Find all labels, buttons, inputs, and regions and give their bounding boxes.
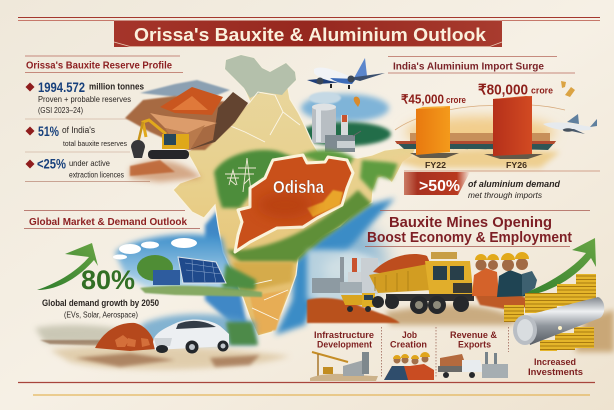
benefit: increased investments: Increased [534,357,576,367]
stat: share of India: total bauxite reserves [63,139,127,148]
Odisha highlighted state: Odisha [273,177,324,197]
illustration: gold coins [504,274,596,351]
callout: imports share [404,171,600,200]
title banner: Orissa's Bauxite & Aluminium Outlook [134,24,487,45]
bar chart: import value: FY22 [425,161,447,170]
stat: total reserves: million tonnes [89,82,144,92]
benefit: infrastructure development: Infrastructure [314,330,374,340]
Odisha highlighted state [235,155,353,252]
icon: airplane right [543,114,597,145]
stat: 80 percent demand growth: 80% [81,265,135,295]
heading: mines opening: Bauxite Mines Opening [389,215,552,231]
illustration: dump truck [369,252,474,314]
icon: growth arrow [37,243,98,290]
illustration: sky, solar panels, landscape [113,234,262,297]
benefit: job creation: Job [402,330,417,340]
stat: share of India: of India's [62,125,95,135]
stat: total reserves: (GSI 2023–24) [38,106,83,115]
benefit: increased investments: Investments [528,367,583,377]
illustration: small dump truck [341,293,375,312]
bar chart: import value: crore [446,95,466,105]
airplane top [307,58,385,89]
icons: floating aluminium flakes [561,81,575,97]
heading: mines opening [365,210,590,246]
map of India [173,55,417,336]
benefit: infrastructure development: Development [317,340,372,350]
stat: total reserves: Proven + probable reserves [38,94,131,104]
heading: import surge: India's Aluminium Import Surge [393,60,544,72]
callout: imports share: of aluminium demand [468,179,560,190]
illustration: refinery skyline [307,250,385,300]
illustration: workers [472,252,537,297]
benefit: job creation [384,330,434,380]
benefit: revenue and exports: Revenue & [450,330,497,340]
heading: global market: Global Market & Demand Outlook [29,216,187,228]
benefit: increased investments [528,357,583,377]
callout: imports share: met through imports [468,191,542,200]
bar chart: import value: crore [531,86,553,96]
bar chart: import value: FY26 [506,161,528,170]
illustration: green rising arrow [510,238,596,297]
bar chart: import value: ₹45,000 [401,92,444,106]
benefit: job creation: Creation [390,340,427,350]
benefit: infrastructure development [310,330,378,381]
stat: total reserves: 1994.572 [38,80,85,95]
panel scene: top clouds and nuclear plant landscape [299,92,391,152]
stat: extraction licences [25,152,150,182]
stat: 80 percent demand growth [42,265,159,320]
stat: share of India [25,119,140,148]
heading: reserve profile: Orissa's Bauxite Reserve Profile [26,60,172,72]
benefit: revenue and exports: Exports [458,340,491,350]
illustration: aluminium cylinder [513,297,604,345]
transmission towers [225,158,256,192]
bay of bengal and sea wash behind map [205,198,395,340]
bar chart: import value: ₹80,000 [478,82,528,98]
benefit: revenue and exports [438,330,508,378]
stat: extraction licences: extraction licences [69,170,124,180]
illustration: bauxite mine [125,80,248,182]
stat: 80 percent demand growth: (EVs, Solar, Aerospace) [64,310,138,320]
bar chart: import value [390,82,565,170]
stat: 80 percent demand growth: Global demand growth by 2050 [42,298,159,309]
illustration: mining ground and bauxite heap [307,290,614,352]
stat: extraction licences: under active [69,158,110,168]
heading: global market [24,210,200,228]
title banner [18,18,600,47]
heading: mines opening: Boost Economy & Employment [367,230,572,246]
heading: import surge [388,56,575,73]
illustration: car and bauxite pile [35,314,290,370]
callout: imports share: >50% [419,178,460,195]
stat: share of India: 51% [38,124,59,139]
stat: total reserves [26,80,144,115]
stat: extraction licences: <25% [37,156,66,172]
